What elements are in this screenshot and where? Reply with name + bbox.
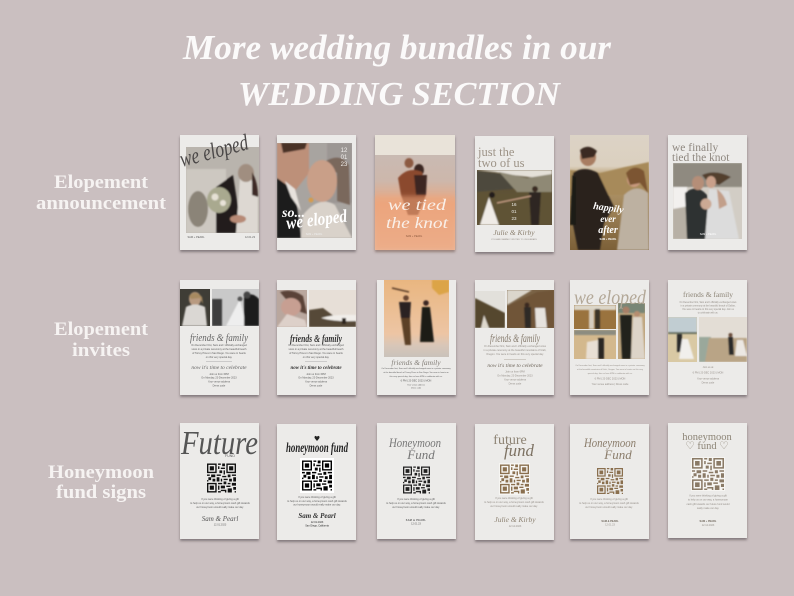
card: invite friends and family 6: 6 PM | 20 DEC 2023 | MON <box>693 372 724 374</box>
card: honeymoon fund sign serif: cash gift towards our future fund would <box>687 503 730 506</box>
card: future fund sign tan: 12.12.2023 <box>509 525 522 528</box>
card: invite friends and family 2: Your venue address <box>305 380 328 384</box>
card: invite friends and family 3: Your venue address <box>407 384 425 386</box>
body text: If you were thinking of giving a gift <box>397 498 435 501</box>
card: happily ever after announcement: SAM + PEARL <box>600 238 617 241</box>
details text: Join us at <box>703 366 714 369</box>
card: invite we eloped collage: Your venue address | Dress code <box>592 383 629 386</box>
card: invite friends and family 2: now it's time to celebrate <box>290 366 342 371</box>
card: invite friends and family 6: Dress code <box>702 382 715 384</box>
body text: On December first, Sam and I officially exchanged vows <box>680 301 737 304</box>
script: we eloped: we eloped <box>177 129 251 172</box>
card: just the two of us announcement: 16 <box>511 202 517 207</box>
row label: Honeymoon fund signs: fund signs <box>56 482 146 503</box>
card: honeymoon fund sign script: to help us on our way, a honeymoon cash gift towards <box>386 502 447 505</box>
card: honeymoon fund sign with heart: Sam & Pearl <box>298 512 336 520</box>
body text: If you were thinking of giving a gift <box>590 498 628 501</box>
row label: Elopement invites: invites <box>72 340 130 361</box>
photo: field couple <box>668 317 697 362</box>
photo: bw couple <box>212 289 259 326</box>
card: invite we eloped collage: 6 PM | 20 DEC 2023 | MON <box>595 378 626 380</box>
qr code <box>691 457 725 491</box>
card: just the two of us announcement <box>475 136 554 252</box>
card: just the two of us announcement: 01 <box>511 209 517 214</box>
card: invite friends and family 2: on this very special day. <box>303 356 330 359</box>
card: invite friends and family 1 <box>180 280 259 395</box>
card: future fund sign: to help us on our way, a honeymoon cash gift towards <box>190 502 251 505</box>
qr code <box>499 463 530 495</box>
photo: mountains couple <box>477 170 552 225</box>
body text: If you were thinking of giving a gift <box>298 496 336 499</box>
card: honeymoon fund sign tan script: our honeymoon would really make our day. <box>585 506 633 509</box>
card: invite friends and family 4: Your venue address <box>504 378 527 382</box>
photo: couple close <box>277 290 307 327</box>
card: invite friends and family 1: of Torrey Pines in San Diego. You were in hearts <box>192 352 247 355</box>
card: so we eloped announcement <box>277 135 356 250</box>
card: honeymoon fund sign script: 12.01.23 <box>411 522 421 526</box>
card: invite friends and family 2: vows in a private ceremony at the beautiful beach <box>289 348 344 351</box>
heading text: honeymoon <box>682 432 733 443</box>
card: honeymoon fund sign script <box>377 423 456 539</box>
script heading: friends & family <box>190 332 248 344</box>
qr code <box>597 468 623 494</box>
card: honeymoon fund sign tan script <box>570 424 649 539</box>
heading text: just the <box>477 145 515 159</box>
body text: On December first, Sam and I officially exchanged <box>191 344 247 347</box>
card: so we eloped announcement: 01 <box>341 155 348 161</box>
photo: dancing couple with smoke <box>384 280 449 357</box>
card: future fund sign tan: to help us on our way, a honeymoon cash gift towards <box>484 501 545 504</box>
card: just the two of us announcement: 23 <box>511 216 517 221</box>
script: we eloped: we eloped <box>574 287 647 309</box>
title: WEDDING SECTION <box>238 76 561 113</box>
script heading: Honeymoon <box>388 435 441 450</box>
card: we finally tied the knot announcement: tied the knot <box>672 152 730 164</box>
card: happily ever after announcement: ever <box>600 214 616 224</box>
card: invite friends and family 6 <box>668 280 747 395</box>
card: invite friends and family 2: of Torrey Pines in San Diego. You were in hearts <box>289 352 344 355</box>
card: invite friends and family 2: Join us from 6PM <box>306 373 326 376</box>
card: honeymoon fund sign with heart: our honeymoon would really make our day. <box>293 504 341 506</box>
photo: stairs couple <box>699 317 747 362</box>
body text: If you were thinking of giving a gift <box>495 497 533 500</box>
card: invite friends and family 3: Dress code <box>411 388 422 390</box>
card: future fund sign tan: our honeymoon would really make our day. <box>490 505 538 508</box>
card: we finally tied the knot announcement: SAM + PEARL <box>700 233 717 236</box>
row label: Honeymoon fund signs: Honeymoon <box>48 462 154 483</box>
card: honeymoon fund sign with heart: to help us on our way, a honeymoon cash gift towards <box>287 500 348 503</box>
card: invite friends and family 4: now it's time to celebrate <box>487 363 543 369</box>
card: invite we eloped collage <box>570 280 649 395</box>
body text: On December first, Sam and I officially exchanged <box>288 344 344 347</box>
body text: On December first, Sam and I officially exchanged vows <box>484 345 547 348</box>
card: invite friends and family 3 <box>377 280 456 395</box>
card: honeymoon fund sign tan script: 12.01.23 <box>605 524 615 526</box>
card: invite friends and family 4: On Monday, 20 December 2023 <box>497 374 533 378</box>
body text: On December first, Sam and I officially exchanged vows in a private ceremony <box>575 364 645 367</box>
card: just the two of us announcement: two of us <box>478 156 525 170</box>
script heading: friends & family <box>490 331 540 345</box>
script heading: friends & family <box>290 333 342 345</box>
card: just the two of us announcement: YOU ARE WARMLY INVITED TO CELEBRATE <box>491 238 537 241</box>
card: invite friends and family 2: Dress code <box>310 384 323 388</box>
script heading: friends & family <box>391 358 441 367</box>
card: invite friends and family 1: On Monday, 20 December 2023 <box>201 376 237 380</box>
card: happily ever after announcement: after <box>598 225 618 236</box>
card: invite friends and family 2: On Monday, 20 December 2023 <box>298 376 334 380</box>
card: invite friends and family 1: vows in a private ceremony at the beautiful beach <box>192 348 247 351</box>
row label: Elopement announcement: announcement <box>36 193 167 214</box>
row label: Elopement invites: Elopement <box>54 319 149 340</box>
row label: Elopement announcement <box>36 172 167 214</box>
script heading: Honeymoon <box>583 435 636 450</box>
card: honeymoon fund sign with heart <box>277 424 356 540</box>
card: invite friends and family 3: at the beautiful beach of Torrey Pines in San Diego. You were in hearts on <box>383 371 449 374</box>
row label: Elopement invites <box>54 319 149 361</box>
row label: Honeymoon fund signs <box>48 462 154 503</box>
card: future fund sign tan: fund <box>504 441 534 460</box>
card: invite friends and family 1: Join us from 6PM <box>209 373 229 376</box>
script: we tied the knot: we tied <box>388 197 447 214</box>
card: honeymoon fund sign with heart: 12.01.2023 <box>311 521 324 524</box>
date stack: 12 <box>341 148 348 154</box>
card: invite friends and family 3: 6 PM | 20 DEC 2023 | MON <box>401 380 432 382</box>
icon: heart: ♥ <box>314 435 320 443</box>
photo: mountain right <box>507 290 554 328</box>
card: invite friends and family 1: on this very special day. <box>206 356 233 359</box>
card: we tied the knot announcement <box>375 135 455 250</box>
card: future fund sign: our honeymoon would really make our day. <box>196 506 244 509</box>
card: we eloped announcement <box>177 129 259 250</box>
card: invite we eloped collage: at the beautiful mountains of Utah, Oregon. You were in hearts on this very <box>577 368 643 371</box>
card: invite friends and family 4 <box>475 280 554 395</box>
script heading: Future <box>180 425 258 462</box>
body text: If you were thinking of giving a gift <box>201 498 239 501</box>
card: invite friends and family 3: this very special day. Join us from 6PM to celebrate with us. <box>390 375 443 378</box>
script: so we eloped: so... <box>281 206 305 221</box>
title: More wedding bundles in our <box>182 28 611 67</box>
collage photos <box>574 303 645 359</box>
heading text: we finally <box>672 142 719 154</box>
card: future fund sign: FUND <box>225 454 235 458</box>
card: honeymoon fund sign serif: 12.12.2023 <box>702 524 715 527</box>
card: honeymoon fund sign tan script: Fund <box>603 447 632 462</box>
card: invite friends and family 1: Dress code <box>213 384 226 388</box>
photo: couple with bouquet <box>186 147 259 233</box>
card: honeymoon fund sign serif: ♡ fund ♡ <box>685 441 729 452</box>
card: invite friends and family 4: in a private ceremony at the beautiful mountains of Utah, <box>484 349 547 352</box>
card: honeymoon fund sign with heart: San Diego, California <box>305 524 329 528</box>
card: honeymoon fund sign tan script: SAM & PEARL <box>601 520 619 523</box>
script: happily ever after: happily <box>592 201 625 216</box>
card: invite friends and family 2 <box>277 280 356 395</box>
card: honeymoon fund sign serif: to help us on our way, a honeymoon <box>688 498 729 502</box>
script heading: honeymoon fund <box>286 441 349 456</box>
card: honeymoon fund sign script: our honeymoon would really make our day. <box>392 506 440 509</box>
photo: couple close-up <box>277 143 352 238</box>
card: we eloped announcement: SAM + PEARL <box>187 235 205 239</box>
qr code <box>403 466 430 494</box>
card: we tied the knot announcement: SAM + PEARL <box>406 235 423 238</box>
card: we tied the knot announcement: the knot <box>386 215 449 232</box>
card: invite friends and family 4: Join us from 6PM <box>505 370 525 374</box>
card: future fund sign tan: Julie & Kirby <box>494 515 536 524</box>
card: happily ever after announcement <box>570 135 649 250</box>
photo: bride <box>180 289 210 326</box>
card: invite friends and family 4: Dress code <box>509 382 522 386</box>
card: future fund sign tan <box>475 424 554 540</box>
card: honeymoon fund sign script: SAM & PEARL <box>406 519 426 522</box>
photo: couple on rocks <box>673 163 742 239</box>
script names: Julie & Kirby <box>493 228 535 237</box>
card: so we eloped announcement: SAM + PEARL <box>306 233 323 236</box>
heading text: friends & family <box>683 290 733 299</box>
card: invite friends and family 4: Oregon. You were in hearts on this very special day. <box>486 353 544 356</box>
card: so we eloped announcement: we eloped <box>285 206 349 233</box>
heading text: future <box>493 433 527 448</box>
card: invite friends and family 1: now it's time to celebrate <box>191 365 247 371</box>
photo: beach <box>309 290 356 327</box>
card: invite friends and family 6: You were in hearts on this very special day. Join us <box>682 308 735 311</box>
card: invite friends and family 6: in a private ceremony at the beautiful beach of Dallas, <box>681 304 736 308</box>
card: honeymoon fund sign serif: really make our day. <box>697 507 719 510</box>
card: honeymoon fund sign serif: SAM + PEARL <box>700 520 717 523</box>
row label: Elopement announcement: Elopement <box>54 172 149 193</box>
qr code <box>207 464 236 492</box>
card: invite we eloped collage: special day. Join us from 6PM to celebrate with us. <box>588 372 633 375</box>
photo: mountain left <box>475 291 505 328</box>
card: future fund sign: 12.01.2023 <box>214 524 227 526</box>
card: so we eloped announcement: 23 <box>341 162 348 168</box>
photo: embracing couple <box>398 158 427 215</box>
card: honeymoon fund sign serif <box>668 423 747 538</box>
card: invite friends and family 6: to celebrate with us. <box>698 312 719 314</box>
card: we eloped announcement: 12.01.23 <box>245 235 256 239</box>
qr code <box>300 458 334 493</box>
title <box>182 28 611 113</box>
card: honeymoon fund sign script: Fund <box>406 447 435 462</box>
card: invite friends and family 6: Your venue address <box>697 378 720 380</box>
card: future fund sign: Sam & Pearl <box>202 515 238 523</box>
body text: On December first, Sam and I officially exchanged vows in a private ceremony <box>381 367 451 370</box>
body text: If you were thinking of giving a gift <box>689 494 727 498</box>
card: future fund sign <box>180 423 259 539</box>
card: invite friends and family 1: Your venue address <box>208 380 231 384</box>
card: we finally tied the knot announcement <box>668 135 747 250</box>
card: honeymoon fund sign tan script: to help us on our way, a honeymoon cash gift towards <box>579 502 640 505</box>
